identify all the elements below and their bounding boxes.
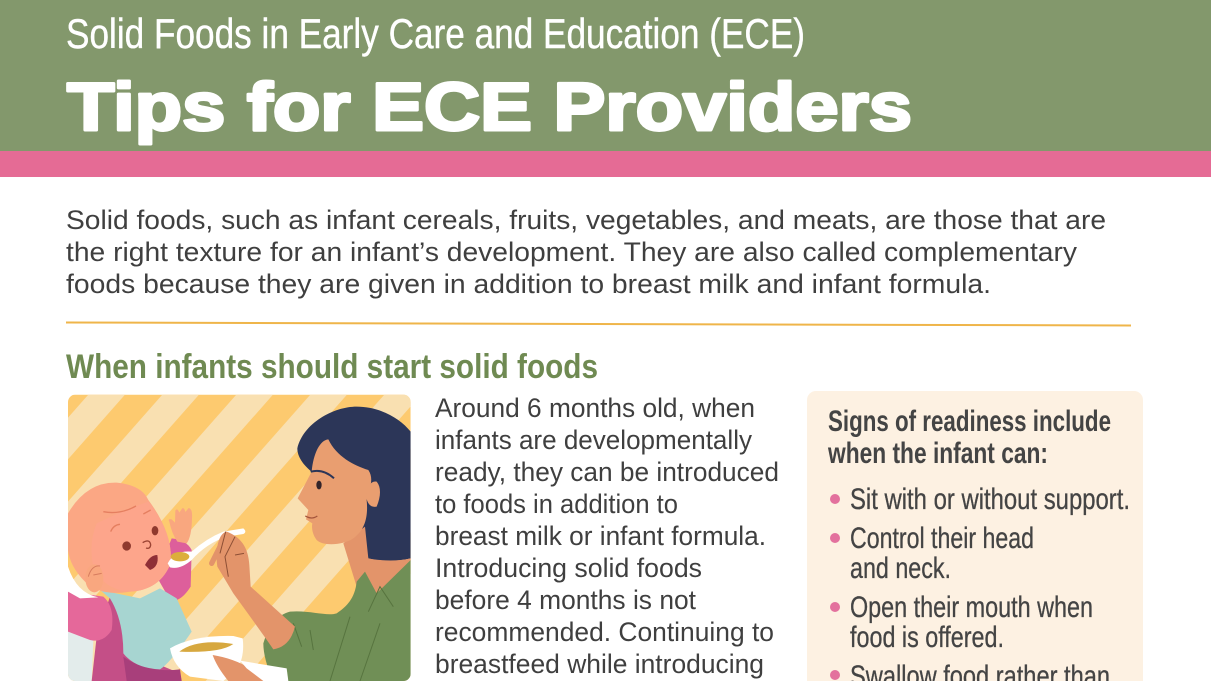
title: Tips for ECE Providers: [67, 69, 912, 145]
caregiver face: [298, 439, 371, 544]
readiness list: [830, 483, 1130, 681]
body text column: infants are developmentally: [435, 425, 753, 455]
intro paragraph: the right texture for an infant’s development. They are also called complementary: [66, 237, 1078, 267]
panel: signs of readiness: [807, 391, 1143, 681]
caregiver neck and shirt: [343, 527, 411, 598]
illustration: caregiver feeding infant: [68, 394, 411, 681]
body text column: before 4 months is not: [435, 585, 697, 615]
intro paragraph: Solid foods, such as infant cereals, fruits, vegetables, and meats, are those that are: [66, 205, 1106, 235]
caregiver hair: [297, 407, 411, 561]
readiness list: and neck.: [850, 552, 951, 585]
body text column: to foods in addition to: [435, 489, 678, 519]
body text column: breastfeed while introducing: [435, 649, 764, 679]
panel heading: [828, 410, 1110, 464]
baby arm and hand: [157, 538, 192, 601]
bib: [100, 588, 192, 669]
readiness list: Control their head: [850, 522, 1034, 555]
baby head: [68, 483, 171, 593]
panel heading: Signs of readiness include: [828, 405, 1111, 438]
readiness list: Sit with or without support.: [850, 483, 1130, 516]
body text column: Around 6 months old, when: [435, 393, 755, 423]
intro paragraph: [66, 205, 1106, 299]
body text column: ready, they can be introduced: [435, 457, 779, 487]
intro paragraph: foods because they are given in addition to breast milk and infant formula.: [66, 269, 991, 299]
body text column: Introducing solid foods: [435, 553, 702, 583]
section heading: When infants should start solid foods: [66, 348, 598, 386]
spoon: [168, 528, 245, 568]
body text column: breast milk or infant formula.: [435, 521, 766, 551]
subtitle: Solid Foods in Early Care and Education (ECE): [66, 10, 805, 57]
readiness list: food is offered.: [850, 621, 1004, 654]
bowl and hand: [170, 636, 243, 681]
body text column: recommended. Continuing to: [435, 617, 774, 647]
caregiver arm and hand: [217, 532, 295, 649]
high chair: [68, 630, 93, 681]
panel heading: when the infant can:: [827, 437, 1048, 470]
body text column: [435, 393, 779, 679]
header banner: [0, 0, 1211, 177]
readiness list: Open their mouth when: [850, 591, 1093, 624]
